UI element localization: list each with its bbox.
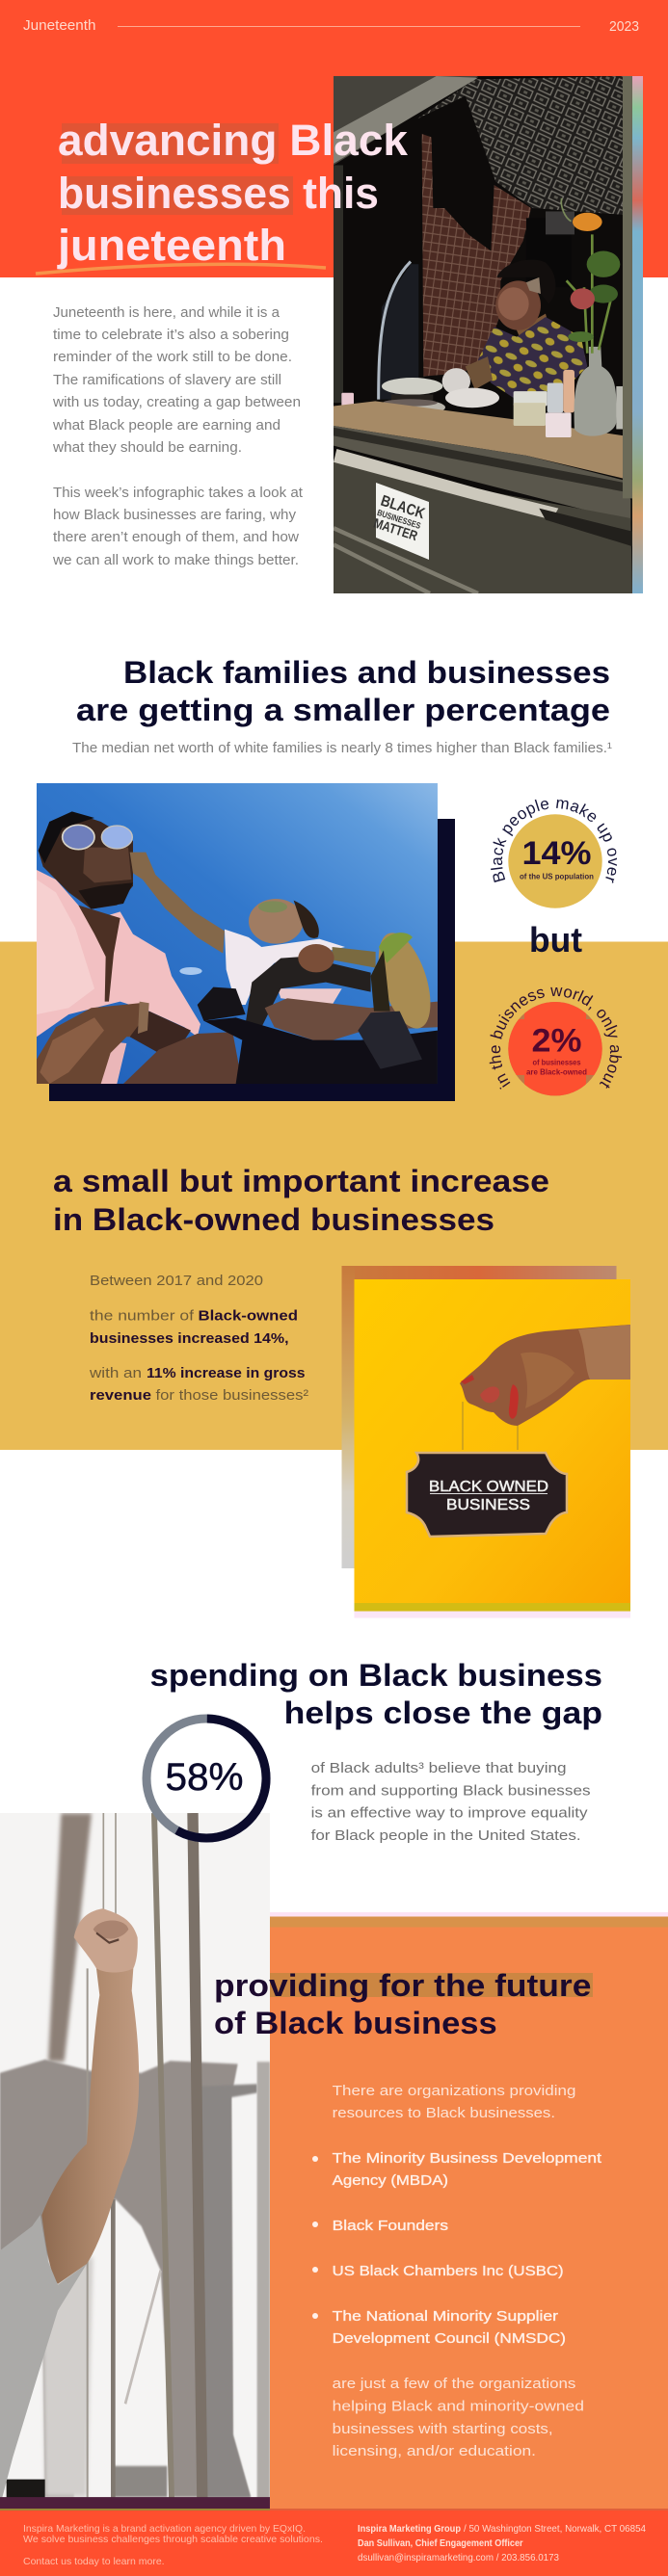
- stat: 2 percent of businesses are Black-owned: 2%: [532, 1023, 582, 1060]
- footer: agency description: We solve business challenges through scalable creative solutions.: [23, 2534, 323, 2545]
- intro text block: [52, 304, 304, 568]
- heading: spending on Black business: helps close the gap: [284, 1695, 602, 1730]
- header bar: [23, 17, 639, 35]
- intro text block: there aren’t enough of them, and how: [53, 529, 299, 545]
- heading: providing for the future: of Black business: [214, 2006, 497, 2040]
- list: organizations: [312, 2150, 602, 2347]
- photo: raised fist on a bridge: [0, 1813, 270, 2510]
- photo: vendor at a window with Black Businesses Matter sign: [334, 76, 643, 593]
- photo: father and child: [37, 783, 441, 1084]
- text block: increase in Black-owned businesses: [89, 1273, 308, 1404]
- stat: 14 percent of the US population: [491, 800, 617, 908]
- panel: red header band: [0, 0, 668, 277]
- heading: providing for the future: providing for the future: [214, 1968, 591, 2003]
- footer: [0, 2510, 668, 2576]
- sign: Black Businesses Matter: [372, 483, 429, 560]
- heading: spending on Black business: [150, 1658, 602, 1730]
- text block: increase in Black-owned businesses: the number of: [90, 1308, 195, 1324]
- subheading: median net worth: The median net worth of white families is nearly 8 times higher than Black families.¹: [72, 740, 612, 756]
- footer: agency description: [23, 2523, 323, 2567]
- text block: 58 percent of Black adults: for Black people in the United States.: [311, 1827, 581, 1844]
- footer: agency description: Contact us today to learn more.: [23, 2556, 165, 2567]
- footer: contact details: Dan Sullivan, Chief Engagement Officer: [358, 2537, 523, 2549]
- heading: Black families and businesses: [76, 655, 610, 727]
- heading: spending on Black business: spending on Black business: [150, 1658, 602, 1693]
- stat: 2 percent of businesses are Black-owned: are Black-owned: [526, 1067, 587, 1077]
- title: advancing Black: [58, 116, 409, 165]
- stat: 14 percent of the US population: of the US population: [520, 871, 594, 881]
- text block: 58 percent of Black adults: [311, 1760, 591, 1844]
- list: organizations: Agency (MBDA): [333, 2172, 448, 2189]
- icon: hand: [460, 1325, 630, 1426]
- heading: Black families and businesses: Black families and businesses: [123, 655, 610, 690]
- stat: 2 percent of businesses are Black-owned: of businesses: [532, 1058, 581, 1067]
- curved label: in the buisness world, only about: [490, 986, 623, 1090]
- intro text block: The ramifications of slavery are still: [53, 372, 281, 388]
- text block: increase in Black-owned businesses: with an: [89, 1365, 142, 1381]
- list: organizations: Black Founders: [333, 2218, 448, 2234]
- sign: Black Businesses Matter: BUSINESSES: [376, 508, 422, 531]
- footer: contact details: [358, 2523, 646, 2563]
- text block: organizations outro: helping Black and minority-owned: [333, 2399, 584, 2414]
- curved label: Black people make up over: [491, 800, 617, 883]
- title underline stroke: [36, 264, 326, 274]
- text block: organizations intro: There are organizations providing: [333, 2083, 575, 2099]
- header bar: Juneteenth: [23, 17, 96, 34]
- text block: organizations outro: [333, 2376, 584, 2459]
- text block: 58 percent of Black adults: of Black adults³ believe that buying: [311, 1760, 567, 1776]
- text block: 58 percent of Black adults: from and supporting Black businesses: [311, 1782, 591, 1800]
- intro text block: Juneteenth is here, and while it is a: [53, 304, 281, 321]
- intro text block: with us today, creating a gap between: [52, 394, 301, 410]
- intro text block: what they should be earning.: [52, 439, 242, 456]
- sign: Black Businesses Matter: MATTER: [372, 514, 419, 543]
- hanging sign: [407, 1453, 567, 1537]
- progress ring: 58 percent: 58%: [166, 1756, 243, 1799]
- sign: Black Businesses Matter: BLACK: [379, 493, 427, 522]
- intro text block: time to celebrate it’s also a sobering: [53, 327, 289, 343]
- stat: 2 percent of businesses are Black-owned: [490, 986, 623, 1096]
- text block: organizations outro: are just a few of the organizations: [333, 2376, 575, 2392]
- panel: yellow band: [0, 942, 668, 1450]
- heading: a small but important increase: a small but important increase: [53, 1164, 549, 1198]
- header bar: 2023: [609, 18, 639, 35]
- text block: organizations outro: licensing, and/or education.: [333, 2443, 536, 2459]
- list: organizations: The National Minority Supplier: [333, 2308, 558, 2325]
- title: businesses this: [58, 169, 379, 218]
- hanging sign: BLACK OWNED: [429, 1479, 548, 1495]
- grey t-shirt: [0, 2215, 87, 2506]
- text block: 58 percent of Black adults: is an effective way to improve equality: [311, 1805, 588, 1821]
- text block: increase in Black-owned businesses: Black-owned: [199, 1308, 298, 1324]
- photo: hand holding Black Owned Business sign: [355, 1279, 630, 1618]
- olive strip under the photo: [0, 2509, 270, 2512]
- list: organizations: US Black Chambers Inc (USBC): [333, 2263, 564, 2279]
- intro text block: what Black people are earning and: [52, 417, 281, 434]
- text block: increase in Black-owned businesses: 11% increase in gross: [147, 1365, 305, 1381]
- intro text block: This week’s infographic takes a look at: [53, 485, 304, 501]
- stat: 14 percent of the US population: 14%: [522, 835, 592, 872]
- title: [36, 116, 409, 274]
- list: organizations: Development Council (NMSDC): [333, 2330, 566, 2347]
- panel: orange organizations panel: [270, 1912, 668, 2511]
- footer: contact details: dsullivan@inspiramarketing.com / 203.856.0173: [358, 2552, 559, 2563]
- text block: increase in Black-owned businesses: revenue: [90, 1387, 151, 1404]
- heading: a small but important increase: in Black-owned businesses: [53, 1202, 494, 1237]
- footer: contact details: Inspira Marketing Group: [358, 2523, 461, 2535]
- text block: increase in Black-owned businesses: for those businesses²: [156, 1387, 308, 1404]
- text block: organizations intro: resources to Black businesses.: [333, 2105, 555, 2121]
- text block: organizations intro: [333, 2083, 575, 2121]
- suspension cables: [88, 1813, 202, 2510]
- intro text block: we can all work to make things better.: [52, 552, 299, 568]
- raised arm and fist: [41, 1908, 139, 2284]
- hanging sign: BUSINESS: [446, 1497, 530, 1513]
- heading: Black families and businesses: are getting a smaller percentage: [76, 693, 610, 727]
- footer: agency description: Inspira Marketing is a brand activation agency driven by EQxIQ.: [23, 2523, 306, 2535]
- text: but: but: [529, 920, 582, 959]
- text block: increase in Black-owned businesses: businesses increased 14%,: [90, 1330, 289, 1347]
- title: juneteenth: [57, 221, 286, 270]
- heading: providing for the future: [214, 1968, 591, 2040]
- intro text block: how Black businesses are faring, why: [53, 507, 297, 523]
- photo shadow block: [49, 819, 455, 1101]
- footer: contact details: / 50 Washington Street, Norwalk, CT 06854: [464, 2523, 646, 2535]
- heading: a small but important increase: [53, 1164, 549, 1237]
- text block: organizations outro: businesses with starting costs,: [333, 2421, 553, 2437]
- bridge tower: [0, 1813, 270, 2510]
- intro text block: reminder of the work still to be done.: [53, 349, 292, 365]
- text block: increase in Black-owned businesses: Between 2017 and 2020: [90, 1273, 263, 1289]
- photo backing block: [341, 1266, 617, 1568]
- list: organizations: The Minority Business Development: [333, 2150, 602, 2167]
- progress ring: 58 percent: [147, 1719, 266, 1838]
